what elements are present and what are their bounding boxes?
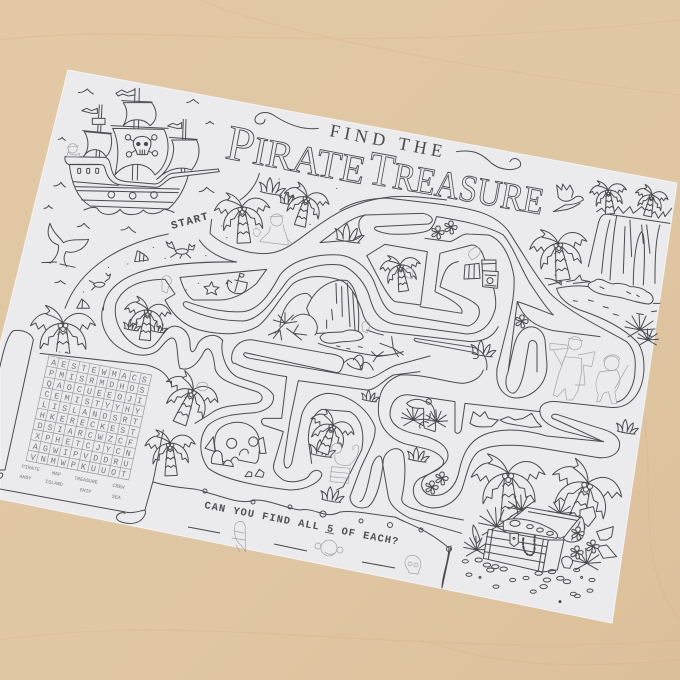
word search grid: L I S L A N D S R T — [41, 400, 139, 428]
cave ground — [320, 330, 363, 343]
maze paths bottom centre — [180, 340, 420, 497]
sand dots — [83, 179, 337, 292]
title: treasure: TREASURE — [364, 142, 549, 225]
inner loop and upper wiggle — [115, 279, 223, 352]
treasure chest — [462, 495, 617, 603]
anchor — [226, 273, 247, 294]
parrot upper right — [553, 184, 583, 212]
right tube spiral — [497, 327, 547, 398]
toucan chamber and flower dead end — [390, 395, 603, 496]
jolly roger skull — [125, 135, 158, 157]
answer line two — [274, 544, 307, 551]
underline of five — [325, 532, 334, 534]
word search grid: X P H E T C J Y C N — [34, 431, 132, 459]
pirates gray figures — [550, 337, 628, 403]
word search grid: V N M W P K U U O T — [29, 452, 127, 480]
small gray parrots on islands — [161, 268, 413, 391]
lower wiggle end — [180, 349, 262, 423]
pirates chamber outer — [540, 370, 644, 442]
cave plants — [268, 313, 307, 340]
word search grid: P M I S R M D H O S — [48, 368, 145, 396]
word search grid: H K E R E C K E S T — [39, 410, 136, 438]
can you find question: CAN YOU FIND ALL 5 OF EACH? — [203, 500, 399, 549]
word search grid: D S I A R C W Z C F — [36, 421, 134, 449]
chest lid — [513, 507, 585, 538]
word search grid: Q A O C U E E O J I — [45, 379, 143, 407]
start label: START — [170, 211, 211, 233]
shell — [135, 251, 148, 262]
word search word list: CREW — [112, 483, 125, 491]
skull — [215, 422, 260, 463]
sword — [473, 525, 480, 543]
palm trees — [30, 178, 670, 539]
icon: skull — [405, 555, 421, 574]
toucan — [401, 399, 448, 432]
answer blanks with icons — [188, 521, 421, 574]
waterfall — [588, 207, 672, 285]
word search word list: TREASURE — [74, 475, 98, 486]
outer loop and lower wiggle — [102, 307, 180, 368]
word search word list — [19, 464, 125, 501]
monkey island gray figure — [253, 214, 292, 245]
outer channel — [378, 370, 620, 508]
coins — [475, 558, 571, 589]
icon: parrot — [232, 521, 246, 552]
pearl necklace — [523, 535, 535, 555]
word search grid — [26, 356, 152, 481]
cave rock — [280, 293, 315, 327]
pirates chamber inner wall — [617, 370, 635, 402]
small skull — [562, 557, 573, 568]
ship sails — [123, 103, 156, 126]
title: pirate: PIRATE — [222, 114, 371, 195]
treasure pile — [503, 519, 558, 538]
rocks beside skull — [205, 437, 266, 467]
back plants — [479, 507, 515, 535]
maze paths upper right — [340, 198, 644, 370]
channels below cave — [232, 340, 327, 363]
chest flowers — [571, 527, 599, 559]
skull cave — [205, 422, 266, 477]
small flowers — [426, 221, 528, 494]
flower right — [516, 315, 528, 328]
leaves bushes beside toucan — [378, 370, 644, 508]
bottom maze lines — [350, 449, 463, 533]
maze paths centre left — [102, 215, 365, 368]
flower group upper — [432, 221, 457, 239]
upper wiggle and skull room wall — [201, 340, 322, 490]
icon: monkey — [315, 540, 343, 556]
flower chamber lower wall — [425, 234, 514, 370]
answer line one — [188, 527, 220, 533]
second crab — [89, 273, 111, 290]
word search grid: A E S T E W M A C S — [50, 358, 148, 386]
word search scroll — [0, 330, 172, 523]
beach decorations — [77, 179, 337, 308]
scroll frame — [0, 330, 33, 470]
grass tufts and plants — [122, 176, 658, 503]
chest lock — [510, 533, 518, 547]
ship hull — [69, 165, 189, 209]
word search grid: A G W I P V D D R U — [32, 442, 129, 470]
crab — [166, 242, 195, 258]
long arcs over the cave — [165, 277, 340, 334]
monstera leaves — [580, 507, 617, 558]
word search word list: MAP — [51, 470, 61, 478]
barrels with gray pirate — [464, 247, 498, 288]
word search word list: SHIP — [79, 487, 92, 495]
answer line three — [362, 562, 395, 568]
title: find the: FIND THE — [328, 120, 444, 161]
cave scene — [232, 280, 430, 378]
ship lookout pirate — [67, 144, 80, 157]
rope vine — [153, 482, 452, 588]
title flourishes — [255, 113, 521, 170]
word search word list: SEA — [111, 494, 121, 501]
starfish — [204, 282, 219, 295]
ship masts and flags — [96, 88, 186, 180]
flower group lower — [426, 472, 448, 494]
chest body — [483, 529, 548, 572]
word search grid: C E M I S T Y Y H Y — [43, 389, 141, 417]
sea waves — [44, 89, 214, 284]
title — [222, 114, 549, 225]
word search word list: AHOY — [19, 474, 32, 482]
pirate ship — [65, 88, 219, 215]
whale tail — [42, 223, 89, 267]
word search word list: ISLAND — [45, 479, 63, 488]
maze paths upper left — [65, 173, 447, 310]
word search word list: PIRATE — [21, 464, 40, 473]
waterfall shore — [545, 275, 660, 315]
monkey on barrel — [330, 443, 359, 483]
